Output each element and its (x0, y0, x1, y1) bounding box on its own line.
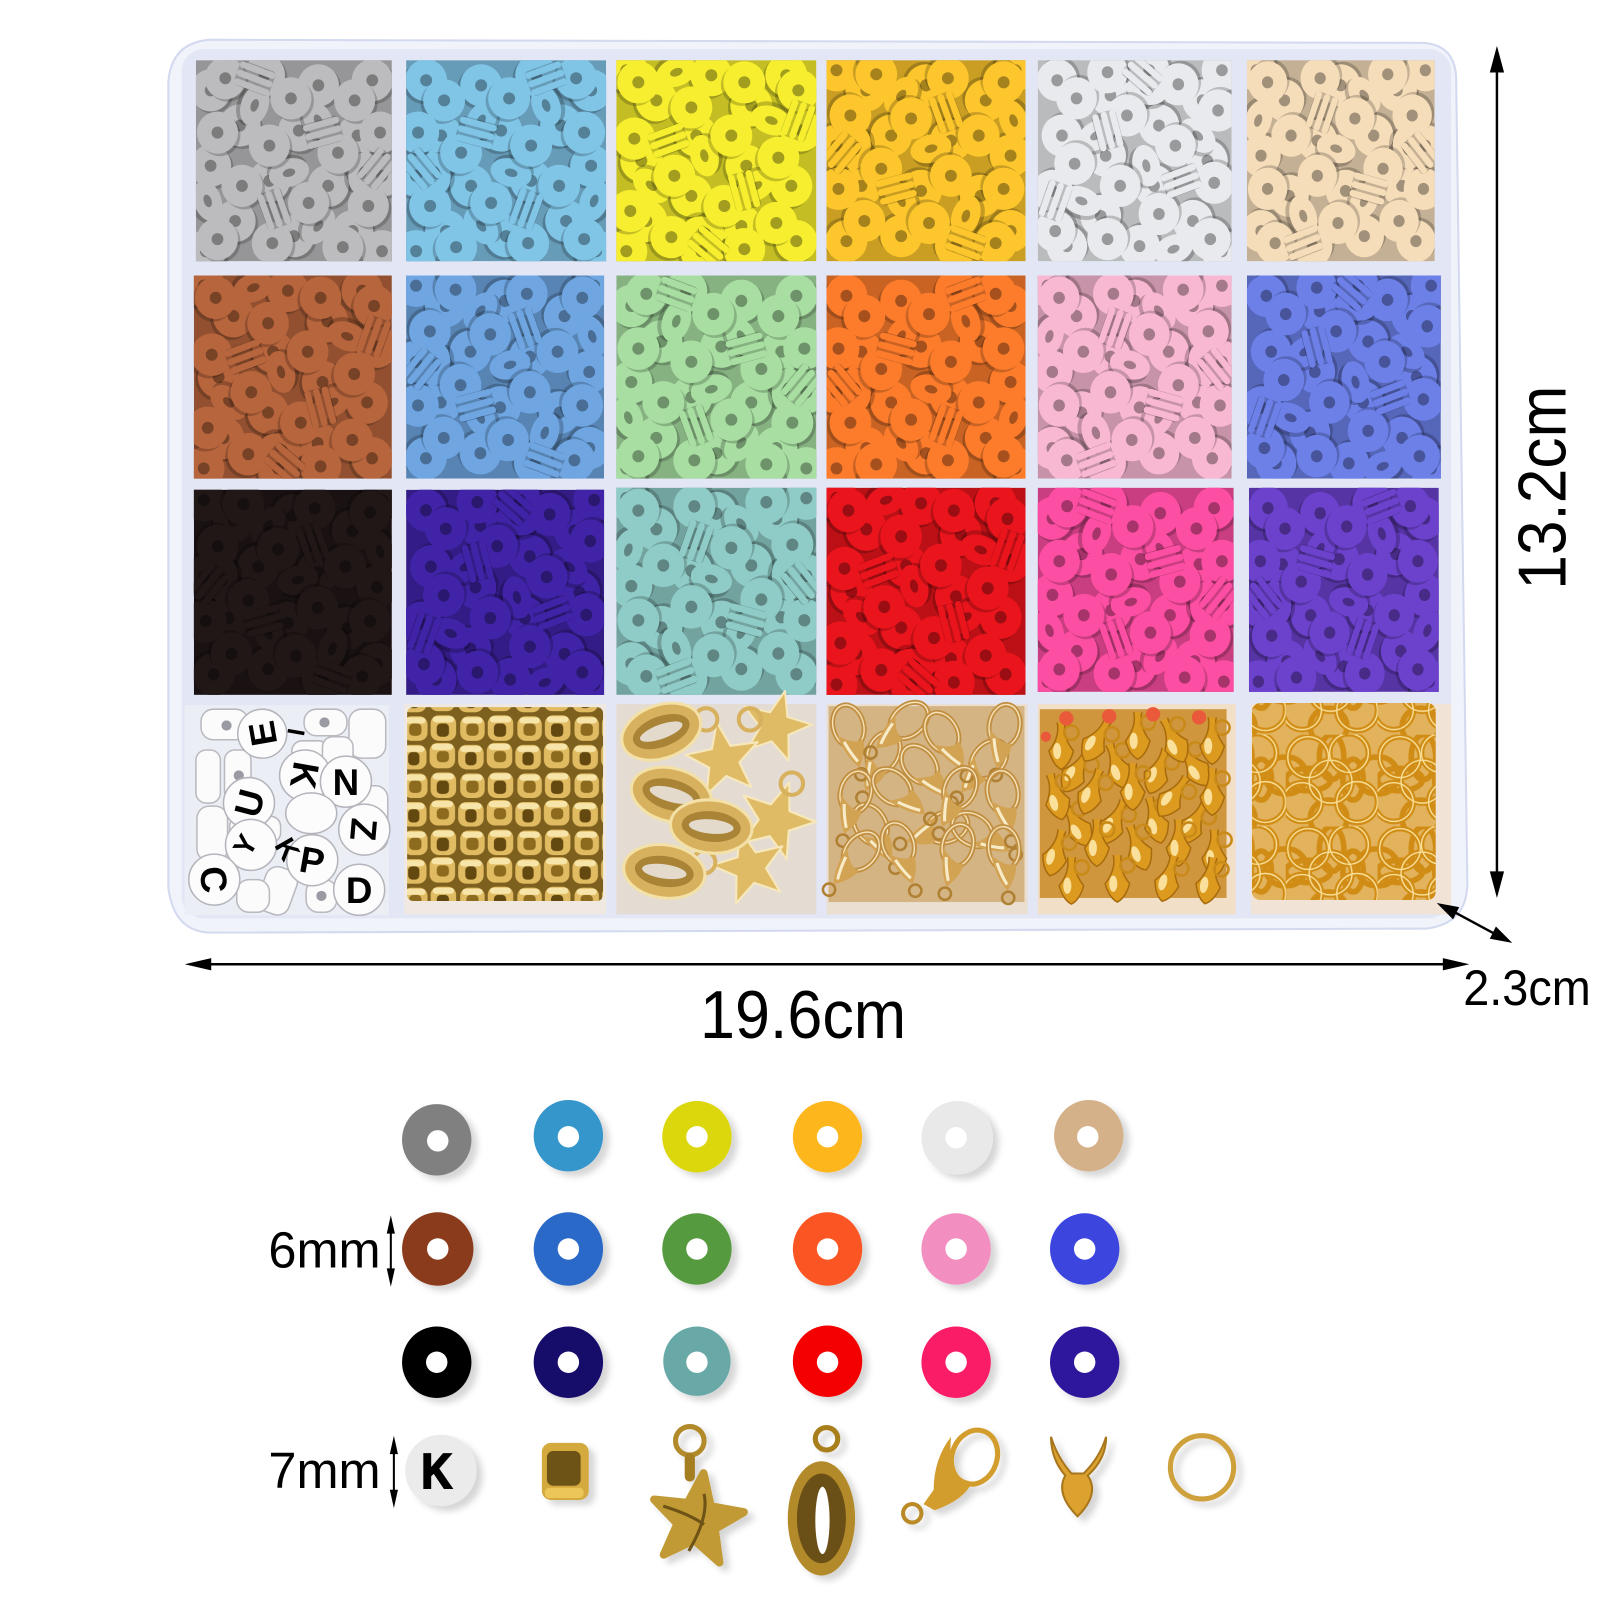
panel: bead organizer box (168, 40, 1467, 933)
compartment: letter beads: I (281, 726, 309, 738)
label: depth 2.3cm: 2.3cm (1463, 960, 1591, 1016)
compartment: violet beads (1248, 488, 1439, 692)
label: 6mm: 6mm (268, 1221, 381, 1278)
icon: letter bead (405, 1435, 477, 1506)
arrow: 6mm (387, 1215, 395, 1287)
legend: bead colors and components (268, 1100, 1234, 1576)
compartment: white beads (1038, 60, 1232, 262)
compartment: gold jump rings (1251, 703, 1451, 914)
compartment: letter beads: U (226, 785, 273, 821)
icon: gold cube bead (542, 1443, 589, 1500)
compartment: gray beads (196, 60, 392, 262)
compartment: gold crimp covers (1038, 704, 1236, 914)
compartment: amber beads (826, 60, 1026, 262)
legend row 3 (402, 1326, 1119, 1398)
compartment: letter beads: K (282, 759, 327, 792)
compartment: letter beads: D (346, 870, 372, 911)
compartment: letter beads: E (241, 718, 285, 749)
compartment: dark purple beads (406, 490, 604, 695)
compartment: letter beads: Z (342, 817, 385, 842)
compartment: blue beads (406, 276, 604, 479)
compartment: letter beads (185, 705, 390, 918)
icon: cowrie shell charm (788, 1428, 855, 1576)
label: width 19.6cm: 19.6cm (700, 978, 906, 1053)
compartment: letter beads: P (296, 839, 328, 883)
arrow: height (1490, 46, 1504, 898)
label: height 13.2cm: 13.2cm (1505, 386, 1580, 590)
compartment: letter beads: N (333, 762, 359, 803)
arrow: depth (1437, 903, 1512, 943)
compartment: gold cube beads (404, 704, 606, 914)
icon: lobster clasp (903, 1424, 1005, 1522)
compartment: shell and starfish charms (614, 682, 825, 914)
compartment: hot pink beads (1038, 488, 1234, 692)
compartment: green beads (616, 276, 816, 479)
legend row 1 (402, 1100, 1123, 1176)
box shell (168, 40, 1467, 933)
compartment: lobster clasps (813, 695, 1029, 914)
compartment: cream beads (1246, 60, 1435, 262)
legend row 2 (402, 1212, 1119, 1286)
compartment: red beads (826, 488, 1026, 695)
compartment: letter beads: Y (227, 829, 265, 862)
compartment: sky blue beads (406, 60, 606, 262)
compartment: brown beads (194, 276, 392, 479)
compartment: pink beads (1038, 276, 1232, 479)
compartment: letter beads: C (192, 865, 235, 895)
compartment: black beads (194, 490, 392, 695)
icon: jump ring (1170, 1436, 1234, 1499)
label: 7mm: 7mm (268, 1442, 381, 1499)
icon: crimp cover (1051, 1437, 1106, 1516)
compartment: teal beads (616, 488, 816, 695)
compartment: yellow beads (616, 60, 816, 262)
arrow: 7mm (390, 1436, 398, 1508)
box interior (182, 49, 1451, 918)
compartment: letter beads: K (268, 833, 306, 867)
compartment: orange beads (826, 276, 1026, 479)
compartment: periwinkle beads (1246, 276, 1441, 479)
arrow: width (185, 958, 1469, 970)
icon: starfish charm (647, 1427, 749, 1565)
icon: letter bead: K (421, 1445, 452, 1499)
